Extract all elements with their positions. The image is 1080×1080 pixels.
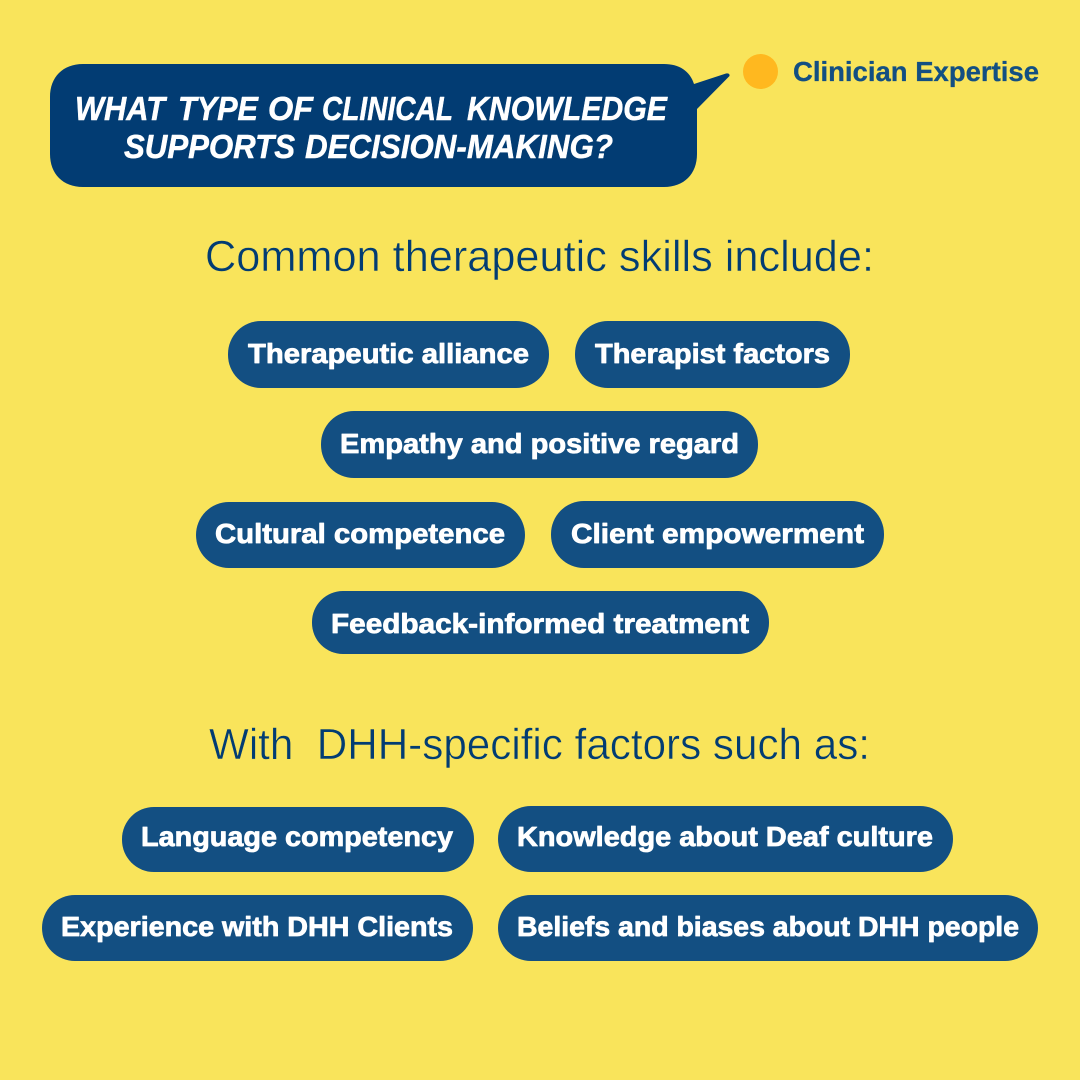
pill: Cultural competence: Cultural competence [215,518,505,549]
pill: Client empowerment: Client empowerment [571,518,864,549]
pill: Beliefs and biases about DHH people [498,895,1038,961]
heading: common therapeutic skills: Common therapeutic skills include: [205,232,874,281]
speech bubble with question: KNOWLEDGE [467,90,668,127]
pill: Empathy and positive regard [321,411,758,478]
pill: Client empowerment [551,501,884,568]
pill: Knowledge about Deaf culture: Knowledge about Deaf culture [517,821,933,852]
pill: Cultural competence [196,502,525,568]
pill: Knowledge about Deaf culture [498,806,953,872]
pill: Experience with DHH Clients [42,895,473,961]
pill: Empathy and positive regard: Empathy and positive regard [340,428,739,459]
label: Clinician Expertise: Clinician Expertise [793,56,1039,87]
pill: Feedback-informed treatment: Feedback-informed treatment [331,608,749,639]
pill: Therapist factors: Therapist factors [595,338,830,369]
pill: Language competency [122,807,474,872]
speech bubble with question [50,64,730,187]
speech bubble with question: WHAT [75,90,168,127]
pill: Beliefs and biases about DHH people: Beliefs and biases about DHH people [517,911,1019,942]
icon: orange dot [743,54,778,89]
pill: Therapeutic alliance: Therapeutic alliance [248,338,529,369]
pill: Experience with DHH Clients: Experience with DHH Clients [61,911,453,942]
speech bubble with question: DECISION-MAKING? [305,128,613,165]
heading: DHH-specific factors: With DHH-specific factors such as: [209,720,870,769]
speech bubble with question: CLINICAL [322,90,453,127]
pill: Therapeutic alliance [228,321,549,388]
speech bubble with question: TYPE [178,90,259,127]
pill: Feedback-informed treatment [312,591,769,654]
pill: Therapist factors [575,321,850,388]
pill: Language competency: Language competency [141,821,453,852]
speech bubble with question: OF [268,90,314,127]
speech bubble with question: SUPPORTS [124,128,295,165]
